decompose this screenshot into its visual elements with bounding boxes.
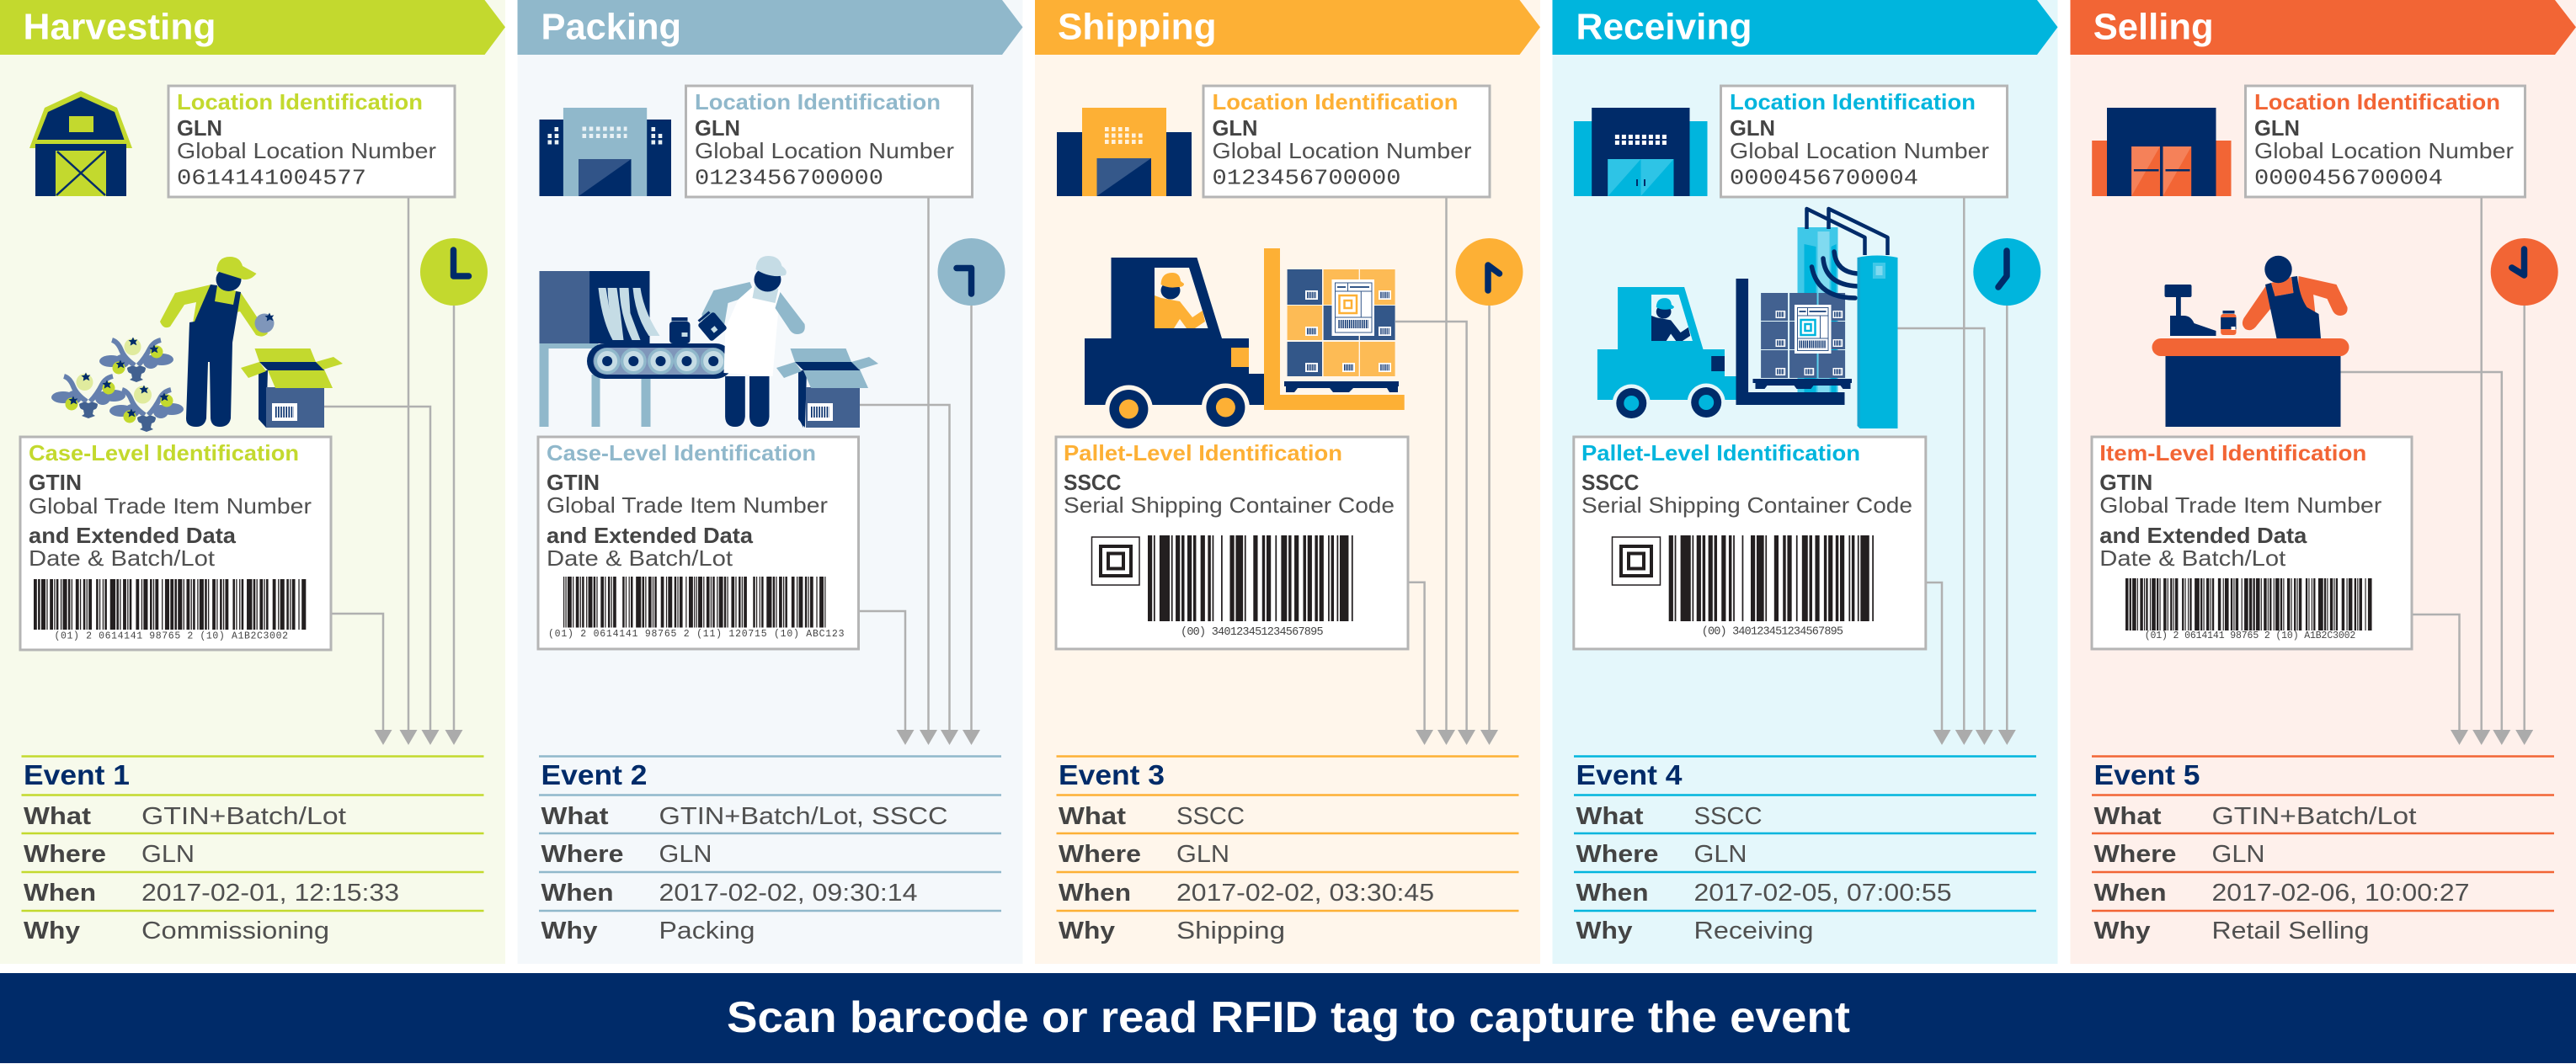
case-level identification box: (01) 2 0614141 98765 2 (11) 120715 (10) ABC123 — [548, 629, 845, 640]
header: Shipping — [1035, 0, 1540, 55]
item-level identification box: Item-Level Identification — [2099, 440, 2366, 466]
event table: When — [24, 880, 96, 907]
case-level identification box: GTIN — [29, 470, 82, 495]
icon: clock — [1455, 238, 1523, 306]
header: Packing — [517, 0, 1022, 55]
icon: shipping warehouse — [1057, 108, 1192, 196]
event table: Event 3 — [1059, 759, 1165, 790]
case-level identification box: Date & Batch/Lot — [547, 545, 733, 571]
event table: GTIN+Batch/Lot — [141, 803, 346, 830]
item-level identification box — [2092, 437, 2412, 649]
event table: 2017-02-01, 12:15:33 — [141, 880, 399, 907]
location identification box: GLN — [695, 115, 740, 141]
pallet label — [1332, 279, 1374, 336]
location identification box: Global Location Number — [2254, 138, 2514, 163]
case-level identification box: (01) 2 0614141 98765 2 (10) A1B2C3002 — [54, 631, 288, 641]
event table: Commissioning — [141, 918, 329, 944]
illustration: packing worker — [695, 256, 805, 427]
case-level identification box: Case-Level Identification — [29, 440, 299, 466]
illustration: cashier — [2243, 256, 2348, 338]
location identification box: GLN — [1213, 115, 1258, 141]
pallet-level identification box: SSCC — [1581, 470, 1640, 495]
location identification box: 0123456700000 — [695, 165, 883, 190]
event table: Why — [1059, 918, 1115, 944]
item-level identification box: Global Trade Item Number — [2099, 492, 2382, 518]
location identification box: 0000456700004 — [1730, 165, 1918, 190]
event table: GLN — [2211, 841, 2265, 868]
event table: What — [541, 803, 609, 830]
event table: When — [1059, 880, 1131, 907]
header: Receiving — [1553, 0, 2058, 55]
illustration: pallet of cases — [1284, 269, 1399, 392]
event table: Event 1 — [24, 759, 130, 790]
event table — [1574, 756, 2036, 944]
header: Shipping: Shipping — [1058, 7, 1216, 47]
pallet-level identification box — [1056, 437, 1408, 649]
event table: GLN — [141, 841, 195, 868]
event table: GLN — [1176, 841, 1229, 868]
event table — [539, 756, 1001, 944]
case-level identification box: GTIN — [547, 470, 600, 495]
item-level identification box: GTIN — [2099, 470, 2152, 495]
icon: barn — [29, 91, 132, 196]
event table: When — [2093, 880, 2166, 907]
connector lines and arrows — [324, 198, 463, 745]
event table — [1056, 756, 1519, 944]
event table: What — [24, 803, 91, 830]
event table: What — [1576, 803, 1644, 830]
location identification box: Global Location Number — [1730, 138, 1989, 163]
event table: 2017-02-02, 03:30:45 — [1176, 880, 1434, 907]
event table: Why — [541, 918, 598, 944]
event table: Where — [541, 841, 623, 868]
location identification box: GLN — [177, 115, 222, 141]
sscc symbol and barcode: (00) 340123451234567895 — [1702, 626, 1843, 639]
pallet-level identification box — [1574, 437, 1926, 649]
illustration: farmer — [160, 257, 275, 427]
case-level identification box: Global Trade Item Number — [547, 492, 828, 518]
case-level identification box: Date & Batch/Lot — [29, 545, 216, 571]
footer banner: Scan barcode or read RFID tag to capture the event — [727, 993, 1850, 1042]
location identification box — [1203, 86, 1490, 197]
location identification box: Location Identification — [695, 89, 941, 114]
case-level identification box: and Extended Data — [547, 523, 754, 548]
location identification box: GLN — [2254, 115, 2300, 141]
sscc symbol and barcode — [1612, 537, 1875, 639]
pallet-level identification box: Serial Shipping Container Code — [1064, 492, 1395, 518]
pallet label — [1795, 305, 1831, 354]
location identification box: Location Identification — [2254, 89, 2500, 114]
panel: shipping — [1035, 0, 1540, 964]
event table: GLN — [659, 841, 712, 868]
event table: Retail Selling — [2211, 918, 2370, 944]
location identification box: Location Identification — [1213, 89, 1459, 114]
case-level identification box: Case-Level Identification — [547, 440, 816, 466]
icon: retail store — [2092, 108, 2232, 196]
case-level identification box: and Extended Data — [29, 523, 237, 548]
header: Harvesting — [0, 0, 505, 55]
location identification box — [2245, 86, 2525, 197]
location identification box — [168, 86, 455, 197]
event table: Where — [1059, 841, 1141, 868]
location identification box: Location Identification — [177, 89, 423, 114]
illustration: open case — [776, 348, 878, 428]
illustration: open case — [241, 348, 343, 428]
sscc symbol and barcode: (00) 340123451234567895 — [1181, 626, 1324, 639]
icon: clock — [420, 238, 488, 306]
event table: Why — [1576, 918, 1632, 944]
location identification box: 0000456700004 — [2254, 165, 2443, 190]
illustration: rfid portal back column — [1797, 209, 1888, 393]
connector lines and arrows — [1395, 198, 1498, 745]
item-level identification box: and Extended Data — [2099, 523, 2307, 548]
sscc symbol and barcode — [1091, 537, 1354, 639]
event table: 2017-02-05, 07:00:55 — [1694, 880, 1952, 907]
icon: receiving warehouse — [1574, 108, 1708, 196]
illustration: forklift — [1597, 279, 1844, 423]
event table: When — [1576, 880, 1649, 907]
event table: GTIN+Batch/Lot — [2211, 803, 2417, 830]
location identification box: GLN — [1730, 115, 1775, 141]
event table: 2017-02-02, 09:30:14 — [659, 880, 918, 907]
illustration: checkout counter with register — [2152, 285, 2349, 427]
case-level identification box — [20, 437, 331, 650]
event table: When — [541, 880, 613, 907]
event table: Event 4 — [1576, 759, 1683, 790]
event table: Event 2 — [541, 759, 647, 790]
header: Receiving: Receiving — [1576, 7, 1752, 47]
connector lines and arrows — [1898, 198, 2016, 745]
icon: packing facility — [539, 108, 671, 196]
event table: Where — [24, 841, 106, 868]
event table — [2092, 756, 2554, 944]
panel: selling — [2070, 0, 2576, 964]
event table: Receiving — [1694, 918, 1814, 944]
case-level identification box — [538, 437, 859, 649]
location identification box — [1721, 86, 2008, 197]
case-level identification box: Global Trade Item Number — [29, 493, 312, 519]
location identification box: Global Location Number — [1213, 138, 1472, 163]
event table: Event 5 — [2093, 759, 2200, 790]
header: Packing: Packing — [541, 7, 681, 47]
event table: Where — [1576, 841, 1659, 868]
pallet-level identification box: Serial Shipping Container Code — [1581, 492, 1912, 518]
event table: Why — [2093, 918, 2151, 944]
location identification box: Global Location Number — [177, 138, 436, 163]
event table: What — [1059, 803, 1126, 830]
connector lines and arrows — [859, 198, 980, 745]
event table: Shipping — [1176, 918, 1285, 944]
item-level identification box: Date & Batch/Lot — [2099, 545, 2286, 571]
event table — [22, 756, 483, 944]
illustration: conveyor machine — [539, 271, 733, 427]
illustration: forklift — [1085, 248, 1405, 433]
event table: 2017-02-06, 10:00:27 — [2211, 880, 2469, 907]
location identification box: 0614141004577 — [177, 165, 366, 190]
location identification box: Location Identification — [1730, 89, 1976, 114]
panel: receiving — [1553, 0, 2058, 964]
panel: packing — [517, 0, 1022, 964]
header: Harvesting: Harvesting — [24, 7, 216, 47]
pallet-level identification box: Pallet-Level Identification — [1064, 440, 1342, 466]
icon: clock — [1973, 238, 2040, 306]
event table: SSCC — [1176, 803, 1245, 830]
header: Selling: Selling — [2093, 7, 2214, 47]
illustration: tomato plants — [51, 337, 184, 432]
event table: Packing — [659, 918, 755, 944]
location identification box: Global Location Number — [695, 138, 954, 163]
event table: GLN — [1694, 841, 1747, 868]
header: Selling — [2070, 0, 2576, 55]
location identification box: 0123456700000 — [1213, 165, 1401, 190]
panel: harvesting — [0, 0, 505, 964]
item-level identification box: (01) 2 0614141 98765 2 (10) A1B2C3002 — [2145, 630, 2355, 641]
footer banner — [0, 973, 2576, 1063]
event table: SSCC — [1694, 803, 1762, 830]
illustration: rfid reader and signal arcs — [1812, 252, 1898, 428]
location identification box — [685, 86, 972, 197]
event table: What — [2093, 803, 2162, 830]
icon: clock — [2491, 238, 2558, 306]
illustration: pallet of cases — [1753, 293, 1852, 389]
pallet-level identification box: Pallet-Level Identification — [1581, 440, 1860, 466]
pallet-level identification box: SSCC — [1064, 470, 1122, 495]
connector lines and arrows — [2341, 198, 2533, 745]
event table: Why — [24, 918, 80, 944]
event table: Where — [2093, 841, 2176, 868]
icon: clock — [938, 238, 1005, 306]
event table: GTIN+Batch/Lot, SSCC — [659, 803, 948, 830]
